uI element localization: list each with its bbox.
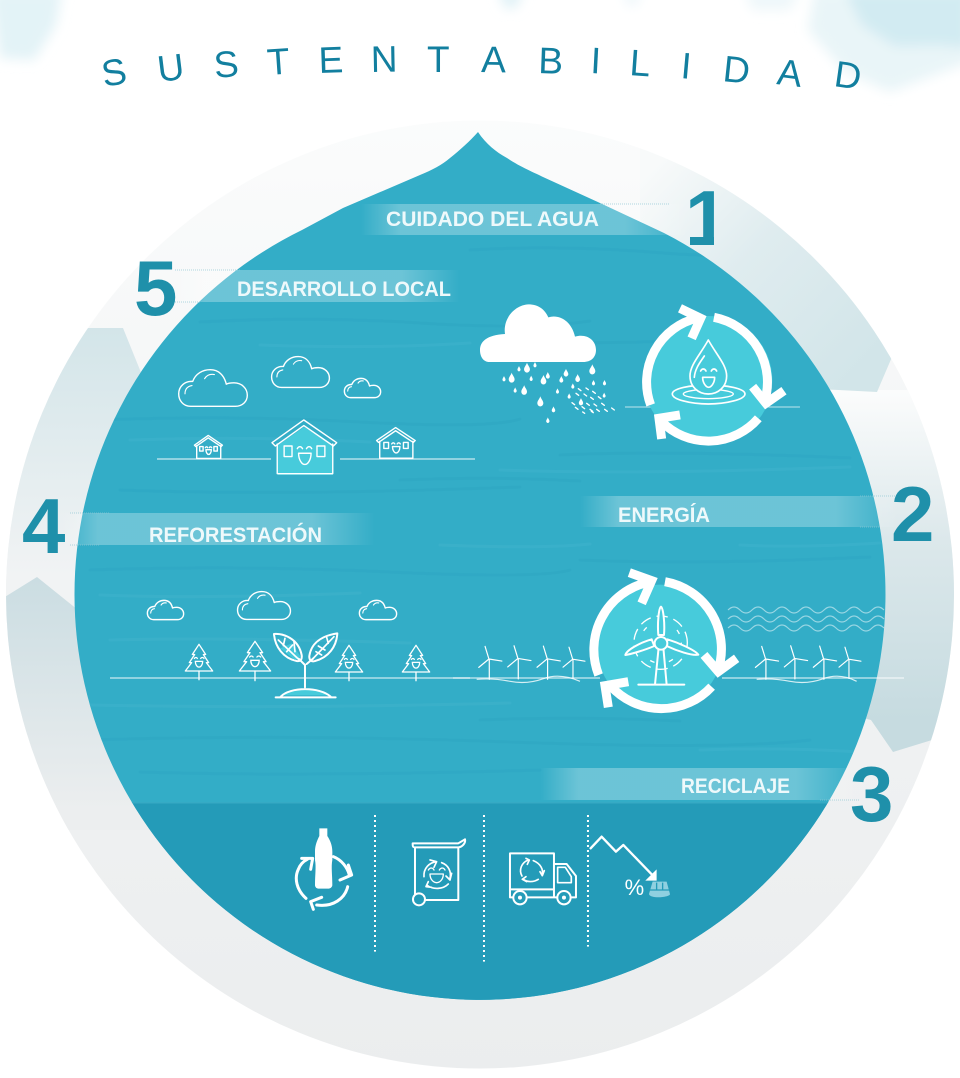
label band: reciclaje bbox=[540, 768, 860, 800]
panel: reciclaje icons bbox=[296, 815, 670, 962]
scene: reforestación bbox=[110, 592, 470, 697]
ring segment: right lower bbox=[865, 466, 954, 752]
dividers bbox=[375, 815, 588, 962]
icon: recycling bin bbox=[413, 839, 465, 905]
icon: small wind turbines bbox=[477, 646, 861, 683]
number 2: 2 bbox=[891, 470, 934, 558]
icon: falling price chart: % bbox=[625, 875, 644, 900]
icon: houses bbox=[194, 420, 415, 475]
icon: clouds bbox=[147, 592, 397, 620]
icon: recycling truck bbox=[510, 853, 576, 904]
dotted leader lines bbox=[70, 204, 895, 800]
scene: energía bbox=[453, 573, 904, 710]
scene: desarrollo local bbox=[157, 357, 475, 475]
water texture bbox=[90, 248, 880, 774]
icon: falling price chart bbox=[591, 837, 670, 900]
number 4: 4 bbox=[22, 482, 65, 570]
icon: trees bbox=[185, 641, 430, 681]
icon: water cycle bbox=[625, 308, 800, 444]
label band: desarrollo local bbox=[170, 270, 460, 302]
heading: cuidado del agua: CUIDADO DEL AGUA bbox=[386, 208, 599, 231]
ring segment: left lower bbox=[6, 577, 116, 778]
icon: wind energy cycle bbox=[594, 573, 737, 710]
heading: reciclaje: RECICLAJE bbox=[681, 775, 790, 798]
ring segment: right upper bbox=[656, 172, 892, 392]
number 5: 5 bbox=[134, 244, 177, 332]
label band: energía bbox=[580, 496, 900, 527]
ground line bbox=[157, 458, 475, 460]
number 1: 1 bbox=[685, 174, 728, 262]
icon: bottle with recycling arrows bbox=[296, 828, 352, 909]
number 3: 3 bbox=[850, 750, 893, 838]
heading: reforestación: REFORESTACIÓN bbox=[149, 523, 322, 547]
label band: reforestación bbox=[60, 513, 375, 545]
water drop bbox=[60, 120, 900, 1012]
watercolor background bbox=[0, 0, 960, 92]
icon: clouds bbox=[179, 357, 381, 406]
icon: waves bbox=[728, 607, 884, 631]
recycling panel background bbox=[132, 802, 828, 1000]
label band: cuidado del agua bbox=[361, 204, 691, 235]
title: SUSTENTABILIDAD bbox=[98, 39, 864, 98]
ground line bbox=[110, 677, 470, 679]
heading: desarrollo local: DESARROLLO LOCAL bbox=[237, 278, 451, 301]
ring segment: left upper bbox=[12, 328, 141, 523]
heading: energía: ENERGÍA bbox=[618, 504, 710, 527]
icon: rain cloud bbox=[480, 304, 614, 423]
icon: sprout bbox=[274, 633, 337, 697]
ground line bbox=[453, 677, 904, 679]
